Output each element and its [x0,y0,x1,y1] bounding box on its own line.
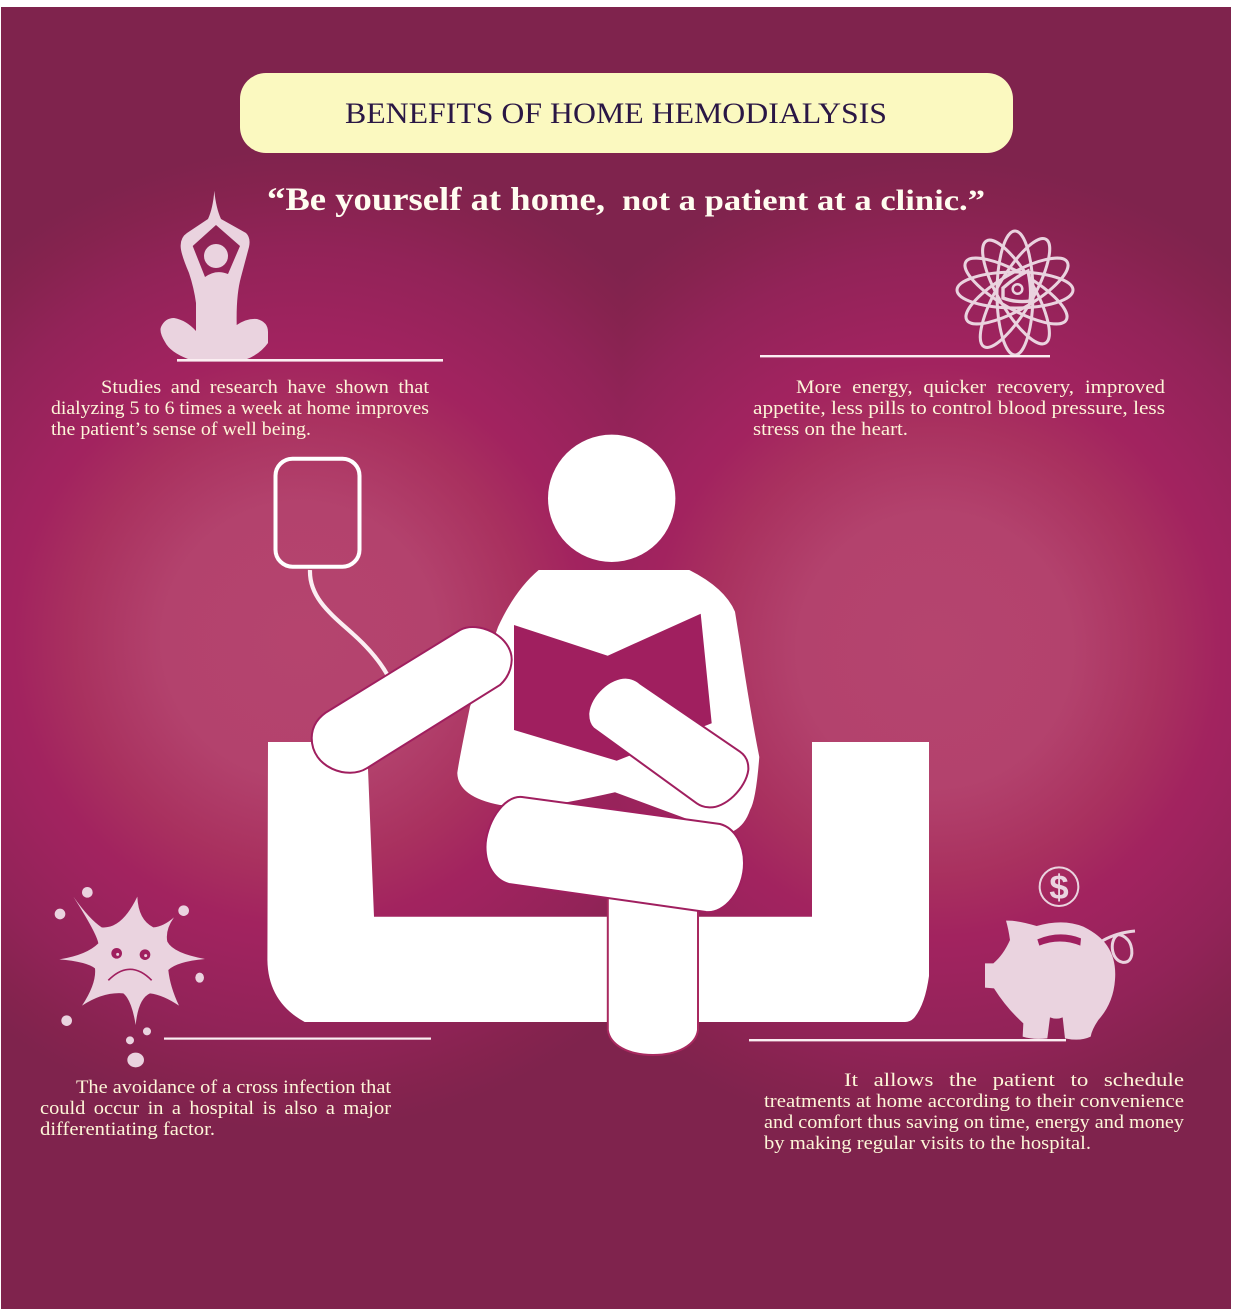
text block: cross infection [40,1078,392,1140]
text block: schedule: treatments at home according to their convenience [764,1092,1184,1112]
quote heading: “Be yourself at home, [267,182,605,218]
central illustration: patient on sofa [267,435,929,1055]
sofa [267,742,929,1022]
pig [985,921,1115,1040]
text block: energy: appetite, less pills to control blood pressure, less [753,399,1165,419]
arm with dialysis access [312,627,512,773]
dialysis tube [310,570,388,676]
text block: well being: the patient’s sense of well being. [51,420,311,440]
divider bottom right [749,1039,1066,1041]
text block: schedule: by making regular visits to the hospital. [764,1134,1091,1154]
divider top right [760,355,1050,357]
text block: energy: stress on the heart. [753,420,908,440]
text block: well being [51,378,430,440]
title banner [240,73,1013,153]
arm holding book [588,678,748,807]
text block: energy: More energy, quicker recovery, improved [796,378,1166,398]
quote heading: not a patient at a clinic.” [622,185,985,217]
text block: cross infection: The avoidance of a cross infection that [76,1078,392,1098]
text block: well being: Studies and research have shown that [101,378,430,398]
icon: yoga figure [160,191,268,359]
body [457,570,759,831]
divider bottom left [164,1038,431,1040]
coin [1040,867,1078,906]
lower leg [608,896,698,1055]
open book [514,614,712,761]
dialysis bag [276,459,360,567]
text block: well being: dialyzing 5 to 6 times a week at home improves [51,399,429,419]
thigh [486,797,744,912]
icon: piggy bank [985,867,1135,1040]
text block: schedule: It allows the patient to schedule [844,1071,1184,1091]
text block: energy [753,378,1166,440]
divider top left [177,359,443,362]
text block: cross infection: could occur in a hospital is also a major [40,1099,391,1119]
text block: cross infection: differentiating factor. [40,1120,215,1140]
quote heading [267,182,985,218]
head [548,435,675,562]
icon: atom [957,230,1076,356]
icon: piggy bank: $ [1049,869,1069,907]
title banner: BENEFITS OF HOME HEMODIALYSIS [345,97,887,130]
text block: schedule: and comfort thus saving on time, energy and money [764,1113,1185,1133]
icon: sad germ [55,887,205,1067]
text block: schedule [764,1071,1185,1154]
